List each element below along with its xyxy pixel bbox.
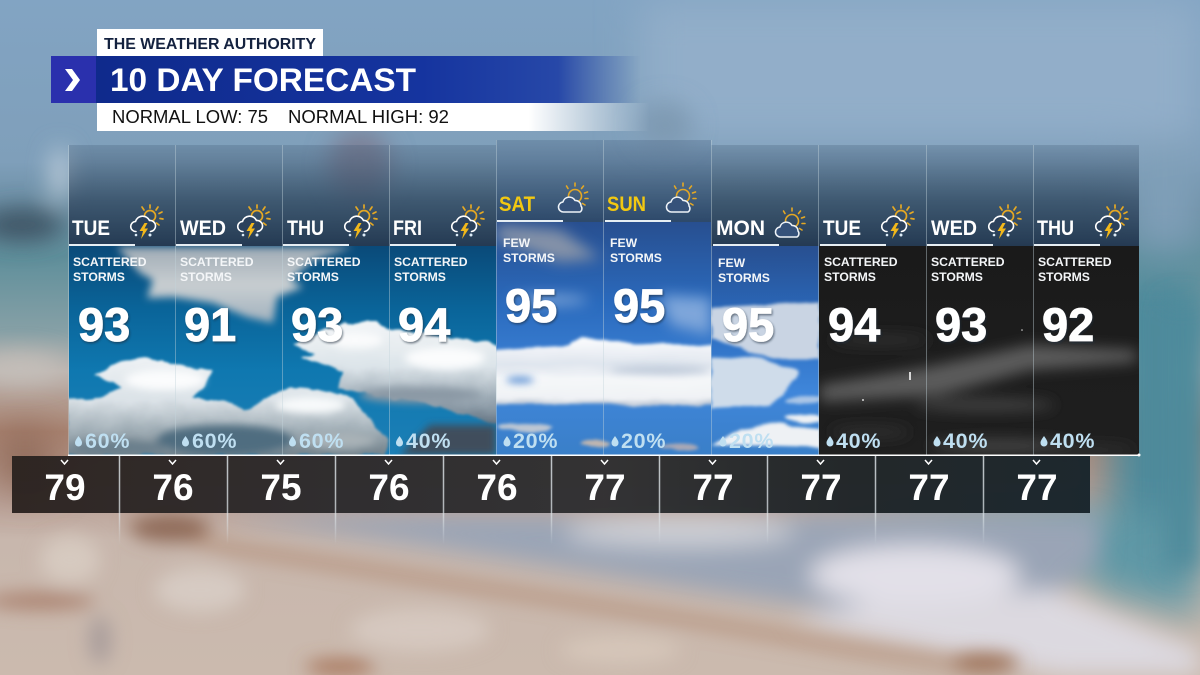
column: Tuesday: TUE xyxy=(72,217,110,240)
column: Saturday: 95 xyxy=(505,279,557,332)
sky imagery: teal clouds, Tue-Fri xyxy=(67,246,500,455)
column: Saturday: FEW xyxy=(503,236,531,250)
low values: 79 xyxy=(44,467,86,508)
low values: 77 xyxy=(584,467,626,508)
column: Monday xyxy=(713,208,805,453)
column: Sunday: FEW xyxy=(610,236,638,250)
column: Friday: FRI xyxy=(393,217,422,240)
column: Sunday: 20% xyxy=(621,429,666,453)
column: Saturday: 20% xyxy=(513,429,558,453)
column: Friday: 40% xyxy=(406,429,451,453)
column: Friday: SCATTERED xyxy=(394,255,468,269)
column: Saturday: STORMS xyxy=(503,251,555,265)
column: Wednesday: 60% xyxy=(192,429,237,453)
column: Monday: 20% xyxy=(729,429,774,453)
column: Monday: STORMS xyxy=(718,271,770,285)
station tag: THE WEATHER AUTHORITY xyxy=(104,36,317,53)
column: Tuesday next week: TUE xyxy=(823,217,861,240)
column: Wednesday: WED xyxy=(180,217,226,240)
column: Wednesday: STORMS xyxy=(180,270,232,284)
column: Thursday: 60% xyxy=(299,429,344,453)
column: Thursday next week: SCATTERED xyxy=(1038,255,1112,269)
column: Monday: 95 xyxy=(722,298,774,351)
column: Sunday xyxy=(605,183,696,453)
column: Wednesday: SCATTERED xyxy=(180,255,254,269)
sky imagery: blue clouds, Sat-Sun xyxy=(490,222,716,455)
title: 10 DAY FORECAST xyxy=(110,62,416,98)
column: Wednesday next week: 93 xyxy=(935,298,987,351)
column: Sunday: 95 xyxy=(613,279,665,332)
column headers backdrop xyxy=(69,140,1139,246)
low values: 77 xyxy=(800,467,842,508)
column: Saturday xyxy=(497,183,588,453)
column: Tuesday xyxy=(69,205,163,453)
low values: 75 xyxy=(260,467,302,508)
low values: 77 xyxy=(692,467,734,508)
column: Wednesday next week: STORMS xyxy=(931,270,983,284)
title bar xyxy=(51,56,640,103)
column: Thursday next week: STORMS xyxy=(1038,270,1090,284)
low values: 77 xyxy=(908,467,950,508)
column: Tuesday next week: STORMS xyxy=(824,270,876,284)
normals strip xyxy=(97,103,650,131)
low chevrons xyxy=(61,460,1040,464)
low values: 76 xyxy=(368,467,410,508)
column: Tuesday: 93 xyxy=(78,298,130,351)
column: Thursday xyxy=(283,205,377,453)
column: Saturday: SAT xyxy=(499,193,535,216)
column: Wednesday: 91 xyxy=(184,298,236,351)
column: Wednesday next week: WED xyxy=(931,217,977,240)
title banner xyxy=(51,29,650,131)
low values: 77 xyxy=(1016,467,1058,508)
panel: overnight low temperatures xyxy=(12,456,1090,545)
column: Tuesday: 60% xyxy=(85,429,130,453)
column: Thursday next week xyxy=(1034,205,1128,453)
normals strip: NORMAL LOW: 75 xyxy=(112,107,268,127)
column: Monday: MON xyxy=(716,217,765,240)
column: Tuesday next week: 40% xyxy=(836,429,881,453)
column: Wednesday next week: SCATTERED xyxy=(931,255,1005,269)
column: Friday xyxy=(390,205,484,453)
low values: 76 xyxy=(476,467,518,508)
column: Thursday: SCATTERED xyxy=(287,255,361,269)
column: Tuesday next week: 94 xyxy=(828,298,880,351)
sky imagery: blue clouds, Mon xyxy=(711,246,827,455)
column: Wednesday next week: 40% xyxy=(943,429,988,453)
panel: forecast columns xyxy=(67,140,1140,456)
column: Thursday: THU xyxy=(287,217,324,240)
column: Monday: FEW xyxy=(718,256,746,270)
column: Friday: 94 xyxy=(398,298,450,351)
column: Thursday: STORMS xyxy=(287,270,339,284)
low values: 76 xyxy=(152,467,194,508)
column: Friday: STORMS xyxy=(394,270,446,284)
icon: chevron xyxy=(65,69,80,91)
column: Tuesday: STORMS xyxy=(73,270,125,284)
column: Wednesday next week xyxy=(927,205,1021,453)
column: Tuesday next week xyxy=(820,205,914,453)
column: Thursday: 93 xyxy=(291,298,343,351)
column: Tuesday next week: SCATTERED xyxy=(824,255,898,269)
normals strip: NORMAL HIGH: 92 xyxy=(288,107,449,127)
column: Sunday: STORMS xyxy=(610,251,662,265)
storm highlights xyxy=(862,329,1023,401)
column: Thursday next week: 92 xyxy=(1042,298,1094,351)
column: Thursday next week: 40% xyxy=(1050,429,1095,453)
column: Tuesday: SCATTERED xyxy=(73,255,147,269)
column separators xyxy=(68,140,1034,455)
sky imagery: dark storm clouds, Tue-Thu xyxy=(819,246,1139,455)
low values xyxy=(44,467,1058,508)
station tag xyxy=(97,29,323,56)
column: Wednesday xyxy=(176,205,270,453)
column: Thursday next week: THU xyxy=(1037,217,1074,240)
bottom axis line xyxy=(68,454,1140,456)
column: Sunday: SUN xyxy=(607,193,646,216)
